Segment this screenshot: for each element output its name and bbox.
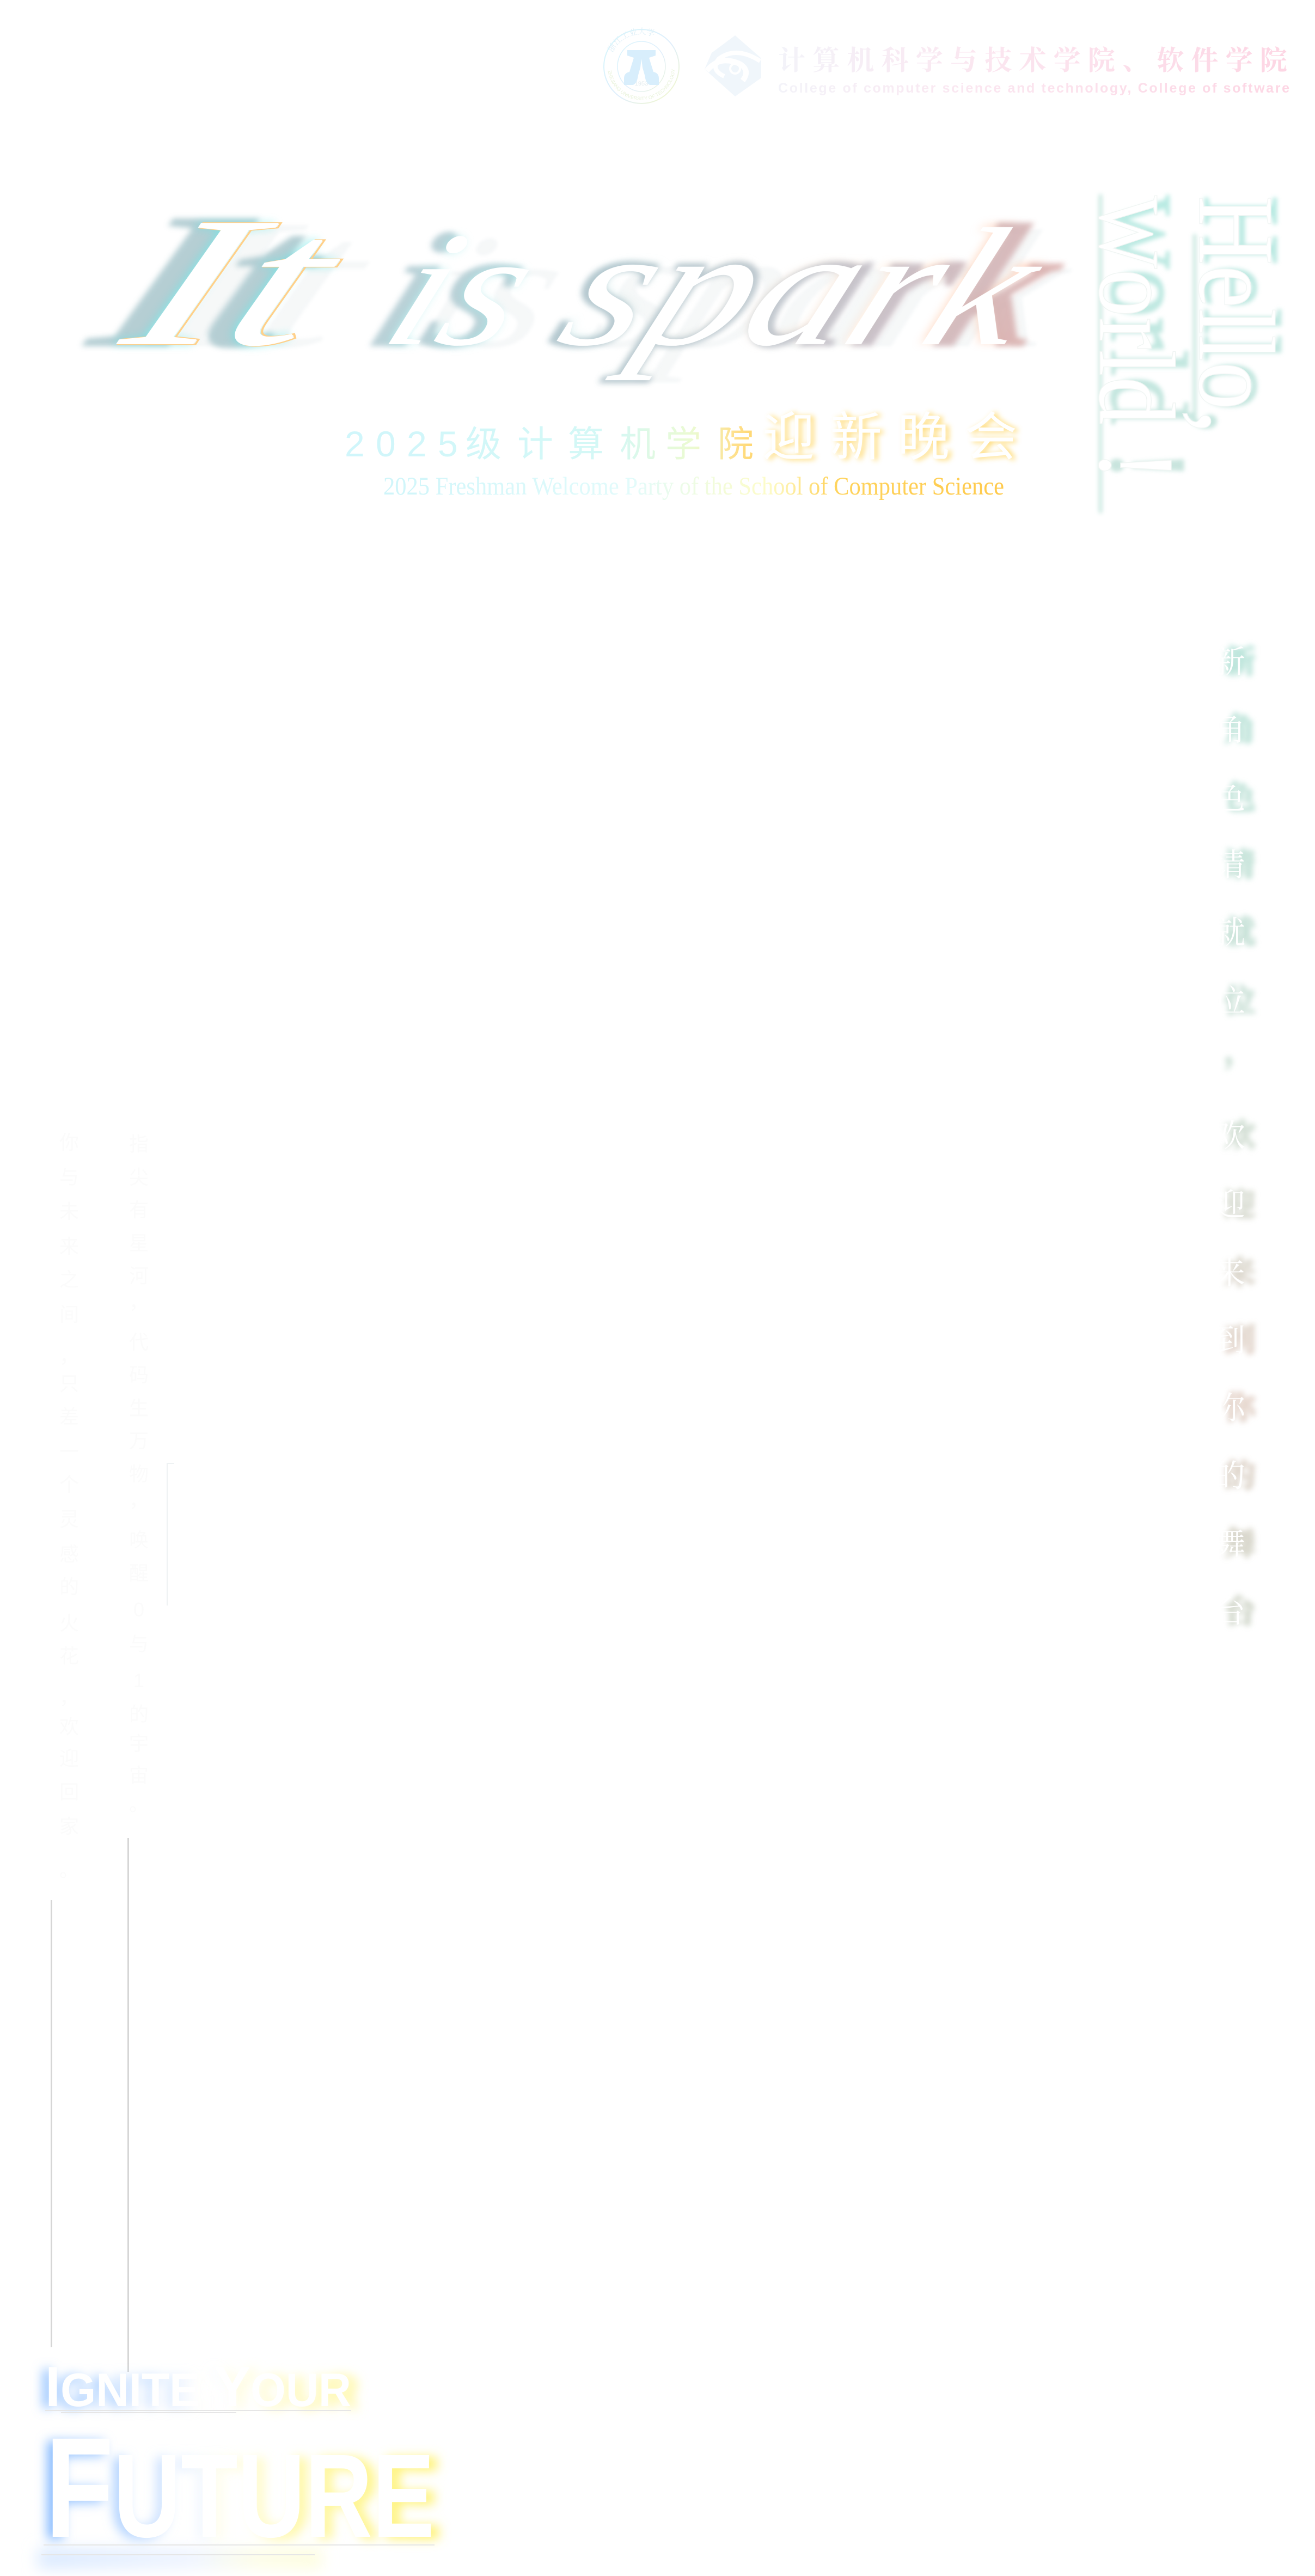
vertical text left column 2: 醒 [129,1562,149,1584]
hello lettering: Hello, [1176,196,1296,434]
vertical text left column 2: 代 [129,1331,149,1353]
icon: university seal: 1953 [635,81,648,87]
slogan lettering: 角 [1214,712,1245,747]
vertical text left column 1: 迎 [59,1747,79,1769]
slogan lettering: 台 [1214,1594,1245,1629]
slogan lettering: 的 [1214,1458,1245,1494]
vertical text left column 2: 星 [129,1232,149,1254]
slogan lettering: 位 [1214,984,1245,1019]
spark colour glow: spark [537,192,1075,379]
vertical text left column 1: 差 [59,1406,79,1428]
vertical text left column 1: 与 [59,1166,79,1188]
slogan shadow: ， [1224,1034,1256,1070]
vertical text left column 2: 生 [129,1397,149,1419]
vertical text left column 2: 1 [133,1669,144,1692]
slogan shadow: 到 [1224,1323,1256,1358]
vertical text left column 2: 。 [129,1793,149,1815]
cyan glow: It [93,179,376,384]
vertical text left column 1: 未 [59,1200,79,1223]
white lettering: It [95,179,378,384]
welcome party: 迎新晚会 [762,408,1017,467]
bracket line [167,1463,174,1606]
icon: university seal: ZHEJIANG UNIVERSITY OF TECHNOLOGY [608,69,675,100]
slogan lettering: 欢 [1214,1118,1245,1153]
vertical text left column 1: 。 [59,1859,79,1881]
slogan shadow: 就 [1224,915,1256,950]
slogan shadow: 色 [1224,780,1256,816]
slogan lettering [1214,644,1246,1629]
cyan glow [93,179,563,384]
slogan lettering: 新 [1214,644,1245,680]
icon: university seal [603,27,680,104]
title: It is spark [63,175,1105,387]
slogan lettering: 你 [1214,1390,1246,1426]
far pale shadow: It [125,181,408,387]
vertical text left column 1: 花 [59,1645,79,1667]
hello shadow [1088,194,1301,513]
slogan shadow: 欢 [1224,1118,1256,1153]
vertical text left column 1: 一 [59,1440,79,1463]
slogan lettering: ， [1214,1034,1245,1069]
world lettering: World ! [1076,196,1196,481]
slogan blue glow [40,2358,429,2569]
slogan shadow: 你 [1224,1390,1258,1426]
slogan lettering: 就 [1214,915,1245,950]
slogan shadow: 迎 [1224,1187,1256,1223]
vertical text left column 1: 之 [59,1268,79,1291]
far pale shadow: is [393,201,595,382]
vertical text left column 2: 宇 [129,1732,149,1755]
vertical text left column 2: 河 [129,1265,149,1287]
ignite lettering: IGNITE [45,2355,200,2419]
gold outline: It [97,179,381,384]
slogan: ignite your future [38,2355,442,2569]
slogan shadow: 新 [1224,644,1256,680]
hello shadow: World ! [1088,196,1208,481]
your lettering: YOUR [214,2355,351,2419]
college name chinese: 计算机科学与技术学院、软件学院 [778,45,1294,76]
slogan lettering: 请 [1214,847,1245,883]
subtitle chinese [345,408,1020,468]
slogan shadow [1224,644,1258,1629]
slogan blue glow: YOUR [209,2358,346,2421]
vertical text left column 1: 火 [59,1612,79,1634]
slogan yellow glow: FUTURE [53,2410,442,2569]
vertical text left column 1: 你 [59,1131,79,1153]
line: 2025 computer school: 2025级计算机学院 [345,424,754,464]
slogan shadow: 台 [1224,1594,1257,1629]
slogan lettering: 迎 [1214,1187,1245,1223]
slogan blue glow: IGNITE [40,2358,194,2421]
dark offset shadow: spark [529,190,1097,383]
heading: Hello, World! [1076,194,1301,513]
vertical text left column 2: 0 [133,1598,144,1621]
slogan shadow: 的 [1224,1458,1256,1494]
slogan shadow: 来 [1224,1255,1256,1291]
slogan shadow: 角 [1224,712,1256,747]
vertical text left column 2: 尖 [129,1166,149,1188]
vertical text left column 2: 唤 [129,1529,149,1551]
icon: university seal: 浙江工业大学 [607,27,655,52]
welcome party shadow: 迎新晚会 [766,410,1020,468]
vertical text left column 1: ， [59,1345,79,1367]
vertical text left column 2: 物 [129,1463,149,1485]
vertical text left column 1: 感 [59,1543,79,1565]
dark offset shadow: It [63,175,362,386]
vertical text left column 2: 宙 [129,1764,149,1786]
header logos [603,27,1294,104]
vertical text left column 2: 码 [129,1364,149,1386]
slogan lettering: 色 [1214,780,1245,816]
vertical text left column 1: 回 [59,1781,79,1803]
vertical text left column 1: 只 [59,1372,79,1395]
vertical text left column 2 [129,1133,149,1815]
vertical rule right [127,1838,129,2372]
far pale shadow: spark [567,196,1105,383]
vertical slogan right [1214,644,1258,1629]
underlines [41,2410,435,2555]
slogan lettering: 到 [1214,1323,1245,1358]
hello shadow: Hello, [1181,196,1301,434]
white lettering: spark [537,194,1075,381]
vertical rule left [51,1900,52,2347]
vertical text left column 1: 个 [59,1473,79,1495]
slogan lettering: 舞 [1214,1526,1245,1561]
slogan yellow glow [53,2358,442,2569]
vertical text left column 1: 的 [59,1576,79,1598]
soft base glow [38,2549,321,2568]
vertical text left column 2: ， [129,1291,149,1313]
vertical text left column 2: ， [129,1489,149,1511]
vertical text left column 2: 指 [129,1133,149,1155]
future lettering: FUTURE [45,2408,435,2567]
white lettering: is [363,199,565,380]
vertical text left column 2: 的 [129,1703,149,1725]
vertical text left column 1: 来 [59,1235,79,1258]
vertical text left column 2: 有 [129,1199,149,1221]
dark offset shadow [63,175,1097,386]
dark offset shadow: is [345,194,559,381]
subtitle english: 2025 Freshman Welcome Party of the School of Computer Science [383,472,1004,500]
slogan yellow glow: IGNITE [53,2358,207,2421]
slogan shadow: 位 [1224,984,1256,1019]
vertical text left column 1: 灵 [59,1508,79,1530]
slogan yellow glow: YOUR [222,2358,359,2421]
slogan shadow: 舞 [1224,1526,1256,1561]
vertical text left column 1: ， [59,1686,79,1708]
far pale shadow [125,181,1105,387]
cyan glow: is [360,199,563,380]
vertical text left column 2: 万 [129,1430,149,1452]
vertical text left column 1 [59,1131,79,1881]
college name english: College of computer science and technology, College of software [778,81,1289,96]
vertical text left column 1: 家 [59,1815,79,1838]
slogan shadow: 请 [1224,847,1256,883]
icon: college emblem [705,35,761,96]
white lettering [95,179,1075,384]
slogan blue glow: FUTURE [40,2410,429,2569]
slogan lettering: 来 [1214,1255,1245,1291]
vertical text left column 1: 欢 [59,1716,79,1738]
vertical text left column 1: 间 [59,1303,79,1326]
vertical text left column 2: 与 [129,1633,149,1655]
